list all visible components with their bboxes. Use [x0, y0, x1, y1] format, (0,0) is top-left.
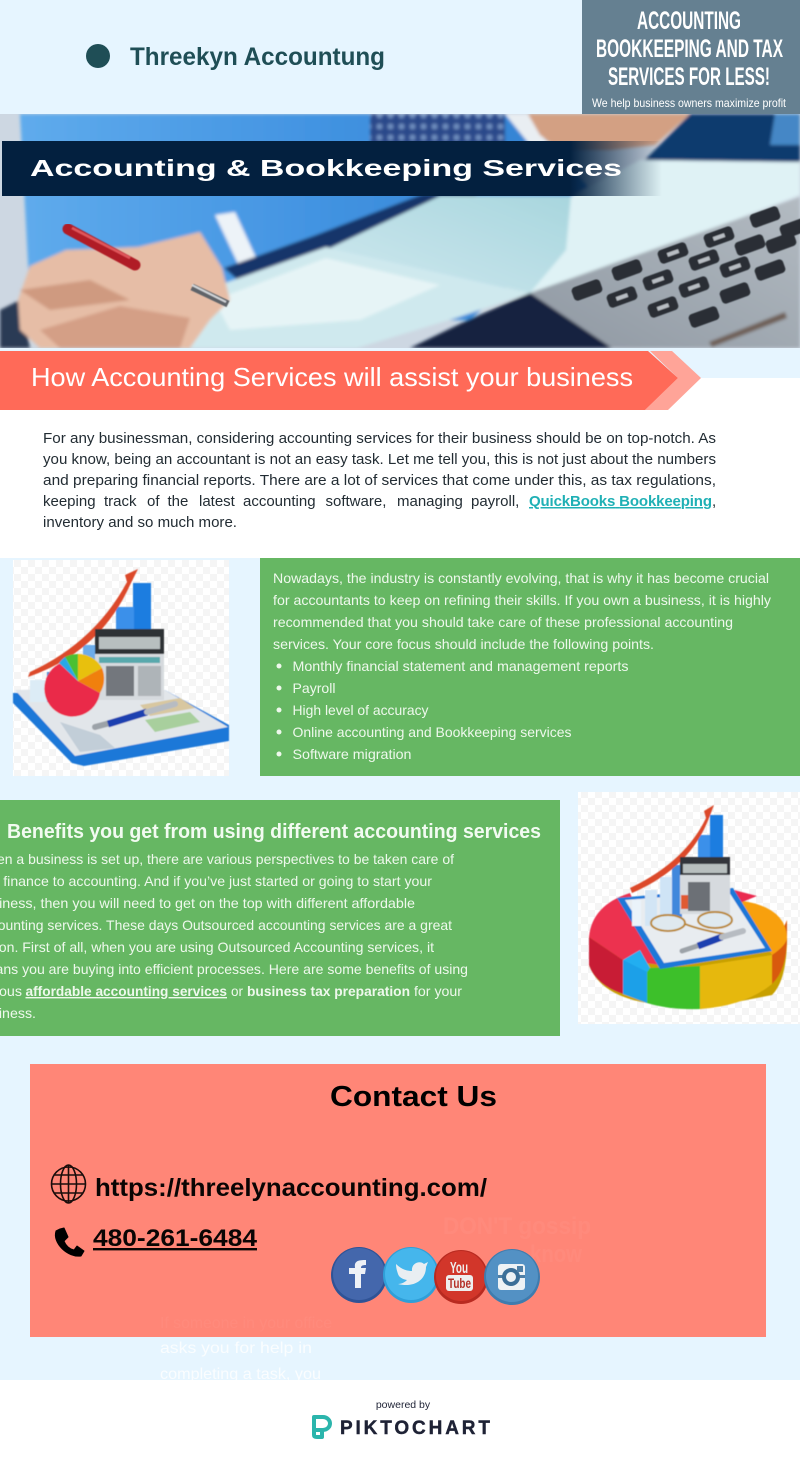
- footer: powered by piktochart: [0, 1380, 800, 1460]
- section heading arrow banner: [0, 351, 701, 410]
- icon: youtube: Tube: [448, 1275, 471, 1291]
- phone number: 480-261-6484: [93, 1225, 258, 1252]
- intro paragraph: ,: [712, 493, 716, 510]
- intro paragraph: For any businessman, considering accounting services for their business should be on top-notch. As: [43, 430, 716, 447]
- panel: benefits: affordable accounting services: [26, 983, 227, 999]
- panel: services list: High level of accuracy: [292, 702, 428, 718]
- icon: youtube: You: [450, 1260, 468, 1277]
- icon: facebook: f: [360, 1263, 361, 1265]
- icon: facebook: [331, 1247, 387, 1303]
- faint overlaid text: DON'T gossip: [443, 1213, 591, 1240]
- panel: services list: recommended that you should take care of these professional accounting: [273, 614, 733, 630]
- icon: instagram: [484, 1249, 540, 1305]
- intro paragraph: inventory and so much more.: [43, 514, 237, 531]
- footer: powered by piktochart: PIKTOCHART: [340, 1418, 490, 1439]
- intro paragraph: accounting: [243, 493, 316, 510]
- icon: twitter: [383, 1247, 439, 1303]
- panel: benefits: business tax preparation: [247, 983, 410, 999]
- panel: contact: [30, 1064, 766, 1337]
- panel: services list: Online accounting and Bookkeeping services: [292, 724, 572, 740]
- icon: piktochart logo: [314, 1417, 330, 1437]
- intro paragraph: latest: [199, 493, 236, 510]
- faint body text behind contact panel: [160, 1340, 321, 1383]
- illustration: calculator, pie chart and clipboard: [13, 560, 229, 776]
- panel: services list: [260, 558, 800, 776]
- panel: services list: for accountants to keep on refining their skills. If you own a business, it is highly: [273, 592, 771, 608]
- icon: globe: [52, 1165, 86, 1203]
- hero banner title: Accounting & Bookkeeping Services: [30, 155, 622, 181]
- panel: services list: Monthly financial statement and management reports: [292, 658, 628, 674]
- panel: benefits: or: [231, 983, 243, 999]
- white body section behind intro: [0, 378, 800, 558]
- panel: benefits: for your: [414, 983, 462, 999]
- intro paragraph: [43, 430, 716, 531]
- faint overlaid text: If someone in your office: [160, 1315, 332, 1332]
- intro paragraph: QuickBooks Bookkeeping: [529, 493, 712, 510]
- panel: services list: Nowadays, the industry is constantly evolving, that is why it has become crucial: [273, 570, 769, 586]
- faint body text behind contact panel: completing a task, you: [160, 1366, 321, 1383]
- website link: https://threelynaccounting.com/: [95, 1174, 487, 1202]
- benefits heading: Benefits you get from using different accounting services: [7, 821, 541, 843]
- social icons: [331, 1247, 540, 1305]
- intro paragraph: track: [104, 493, 137, 510]
- contact heading: Contact Us: [330, 1081, 497, 1113]
- header brand: [86, 43, 385, 71]
- header tagline panel: [582, 0, 800, 114]
- panel: benefits: [0, 800, 560, 1036]
- faint overlaid text: know: [530, 1241, 582, 1268]
- brand name: Threekyn Accountung: [130, 43, 385, 71]
- brand dot: [86, 44, 110, 68]
- panel: services list: services. Your core focus should include the following points.: [273, 636, 654, 652]
- faint body text behind contact panel: asks you for help in: [160, 1340, 312, 1357]
- icon: phone: [55, 1228, 84, 1256]
- intro paragraph: keeping: [43, 493, 96, 510]
- intro paragraph: managing: [397, 493, 463, 510]
- intro paragraph: you know, being an accountant is not an easy task. Let me tell you, this is not just about the numbers: [43, 451, 716, 468]
- hero photo: accounting and bookkeeping: [0, 114, 800, 348]
- panel: services list: Software migration: [292, 746, 412, 762]
- illustration: 3D pie chart with clipboard: [578, 792, 800, 1024]
- intro paragraph: the: [168, 493, 188, 510]
- intro paragraph: payroll,: [471, 493, 519, 510]
- intro paragraph: and preparing financial reports. There are a lot of services that come under this, as tax regulations,: [43, 472, 716, 489]
- icon: youtube: [434, 1250, 488, 1304]
- faint overlaid text: [160, 1213, 591, 1332]
- intro paragraph: of: [147, 493, 160, 510]
- intro paragraph: software,: [326, 493, 386, 510]
- panel: services list: Payroll: [292, 680, 336, 696]
- section heading arrow banner: How Accounting Services will assist your business: [31, 362, 633, 392]
- footer: powered by piktochart: powered by: [376, 1399, 431, 1411]
